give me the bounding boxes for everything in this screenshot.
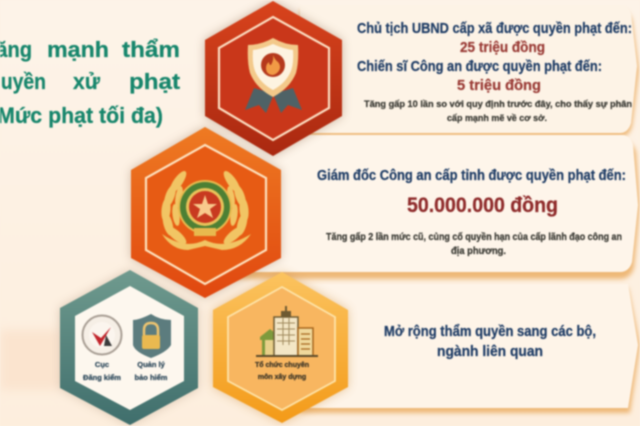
label: Quản lý bảo hiểm: Quản lý: [137, 360, 166, 369]
icon: buildings: [256, 306, 318, 357]
hexagon: red medal: [205, 1, 342, 156]
hexagon: teal agencies: [60, 270, 198, 425]
text block: commune level penalties: Tăng gấp 10 lần so với quy định trước đây, cho thấy sự phân: [364, 99, 632, 109]
icon: Cục Đăng kiểm logo: [82, 316, 122, 354]
label: Cục Đăng kiểm: [83, 360, 121, 382]
text block: provincial level penalty: [317, 168, 626, 257]
panel: ministries: [300, 284, 640, 413]
panel: commune level penalties: [300, 5, 639, 137]
label: Tổ chức chuyên môn xây dựng: Tổ chức chuyên: [255, 361, 309, 369]
title: thẩm: [122, 37, 180, 62]
text block: ministries: Mở rộng thẩm quyền sang các bộ,: [384, 323, 596, 340]
label: Cục Đăng kiểm: Cục: [95, 360, 109, 369]
hexagon: yellow construction: [213, 272, 348, 423]
hexagon: orange police emblem: [131, 127, 281, 298]
text block: provincial level penalty: địa phương.: [451, 246, 506, 257]
text block: commune level penalties: cấp mạnh mẽ về cơ sở.: [447, 113, 547, 123]
label: Cục Đăng kiểm: Đăng kiểm: [83, 373, 121, 382]
title: mạnh: [47, 37, 109, 62]
text block: provincial level penalty: 50.000.000 đồng: [407, 194, 558, 217]
title: phạt: [129, 69, 181, 94]
text block: commune level penalties: [357, 20, 632, 123]
label: Quản lý bảo hiểm: bảo hiểm: [135, 373, 168, 382]
text block: commune level penalties: 5 triệu đồng: [457, 77, 541, 94]
text block: ministries: ngành liên quan: [437, 343, 543, 360]
text block: ministries: [384, 323, 596, 360]
icon: insurance shield lock: [133, 314, 171, 358]
icon: police emblem: [160, 169, 251, 250]
label: Quản lý bảo hiểm: [135, 360, 168, 382]
label: Tổ chức chuyên môn xây dựng: [255, 361, 309, 381]
text block: commune level penalties: Chiến sĩ Công an được quyền phạt đến:: [357, 58, 602, 75]
text block: commune level penalties: 25 triệu đồng: [460, 39, 545, 56]
title: [0, 37, 181, 128]
panel: provincial level penalty: [220, 135, 640, 279]
label: Tổ chức chuyên môn xây dựng: môn xây dựng: [258, 374, 306, 381]
title: xử: [73, 69, 100, 94]
icon: shield medal with flame: [245, 38, 302, 113]
